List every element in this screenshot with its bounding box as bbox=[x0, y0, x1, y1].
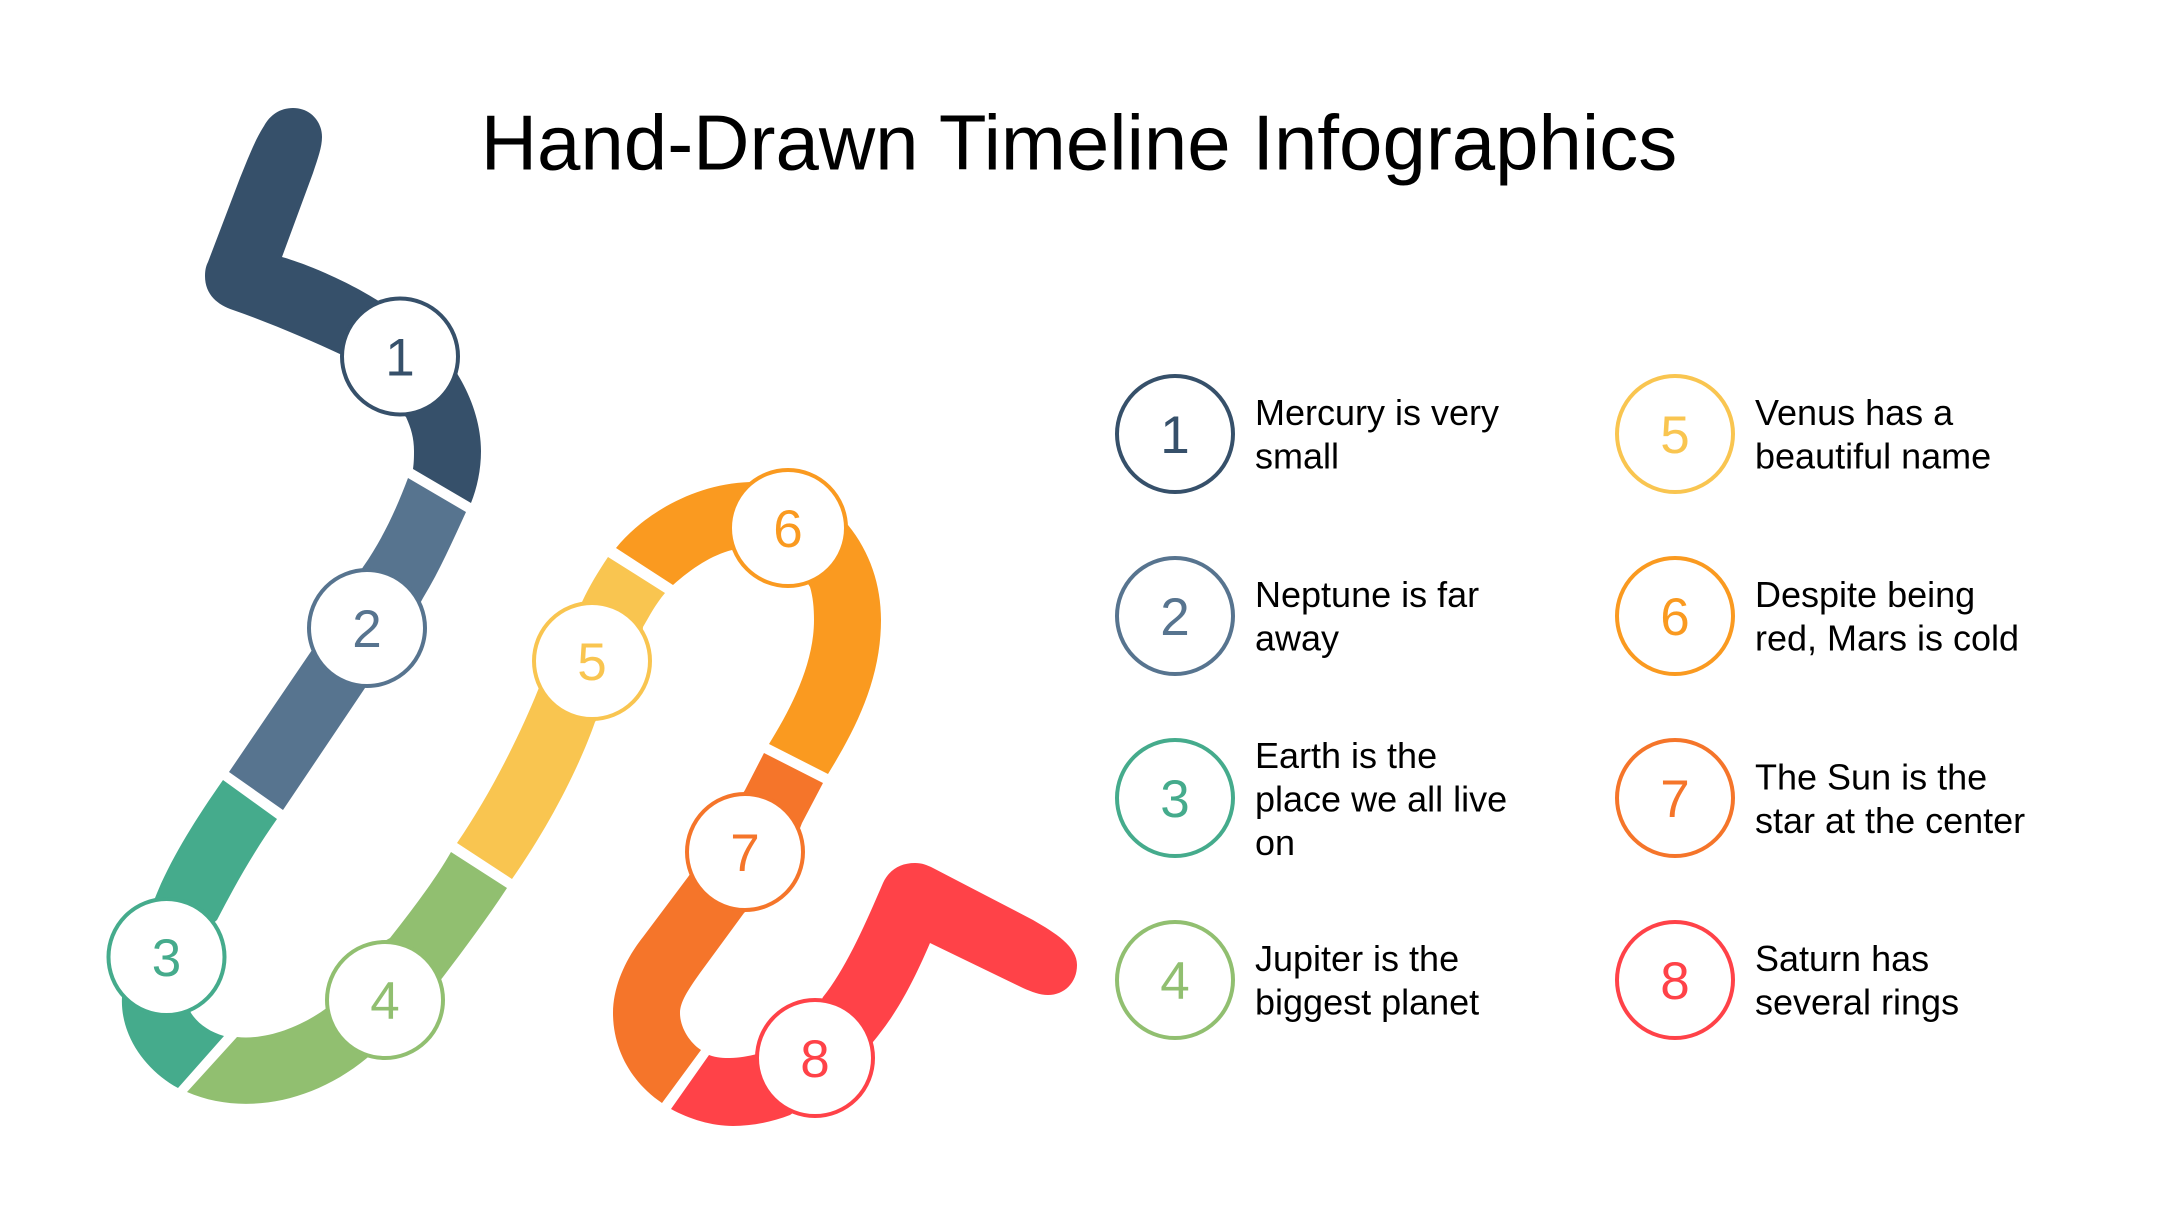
legend item 5: beautiful name bbox=[1755, 436, 1991, 476]
marker 6: 6 bbox=[773, 500, 803, 559]
marker 3: 3 bbox=[152, 929, 181, 988]
marker 4 bbox=[327, 942, 443, 1058]
legend item 1: small bbox=[1255, 436, 1339, 476]
timeline ribbon bbox=[108, 108, 1077, 1126]
legend item 4: Jupiter is the bbox=[1255, 938, 1459, 979]
segment 7 bbox=[613, 753, 823, 1103]
legend item 8: 8 bbox=[1660, 952, 1690, 1011]
legend item 5: Venus has a bbox=[1755, 392, 1954, 433]
legend item 2: away bbox=[1255, 618, 1339, 658]
legend item 3 bbox=[1117, 735, 1507, 863]
marker 5 bbox=[534, 603, 650, 719]
legend item 5: 5 bbox=[1660, 406, 1690, 465]
legend item 7: star at the center bbox=[1755, 800, 2025, 841]
marker 1 bbox=[342, 298, 458, 414]
segment 3 bbox=[122, 780, 277, 1088]
title: Hand-Drawn Timeline Infographics bbox=[481, 98, 1677, 186]
legend item 7: 7 bbox=[1660, 770, 1690, 829]
legend item 2: Neptune is far bbox=[1255, 574, 1479, 615]
marker 6 bbox=[730, 470, 846, 586]
marker 7 bbox=[687, 794, 803, 910]
legend item 1 bbox=[1117, 376, 1499, 492]
segment 8 bbox=[671, 863, 1077, 1126]
legend item 4 bbox=[1117, 922, 1479, 1038]
legend item 2: 2 bbox=[1160, 588, 1190, 647]
legend item 8 bbox=[1617, 922, 1959, 1038]
legend item 6: red, Mars is cold bbox=[1755, 618, 2019, 658]
legend item 7: The Sun is the bbox=[1755, 756, 1987, 798]
legend item 7 bbox=[1617, 740, 2025, 856]
legend item 6: 6 bbox=[1660, 588, 1690, 647]
segment 1 bbox=[205, 108, 481, 503]
legend item 3: Earth is the bbox=[1255, 735, 1437, 776]
legend item 6: Despite being bbox=[1755, 574, 1975, 615]
marker 2: 2 bbox=[352, 600, 382, 659]
marker 8 bbox=[757, 1000, 873, 1116]
marker 3 bbox=[108, 899, 224, 1015]
legend item 3: 3 bbox=[1160, 770, 1190, 829]
legend item 4: 4 bbox=[1160, 952, 1190, 1011]
legend item 6 bbox=[1617, 558, 2019, 674]
marker 1: 1 bbox=[385, 328, 415, 388]
legend item 5 bbox=[1617, 376, 1991, 492]
legend item 4: biggest planet bbox=[1255, 982, 1479, 1022]
legend item 2 bbox=[1117, 558, 1479, 674]
legend item 1: Mercury is very bbox=[1255, 392, 1499, 433]
marker 4: 4 bbox=[370, 972, 400, 1031]
marker 2 bbox=[309, 570, 425, 686]
segment 5 bbox=[457, 557, 665, 879]
marker 7: 7 bbox=[730, 824, 760, 883]
legend item 3: place we all live bbox=[1255, 778, 1507, 820]
marker 8: 8 bbox=[800, 1030, 830, 1089]
marker 5: 5 bbox=[577, 633, 607, 692]
legend item 3: on bbox=[1255, 822, 1295, 863]
legend item 8: several rings bbox=[1755, 982, 1959, 1022]
segment 6 bbox=[616, 482, 881, 774]
segment 4 bbox=[187, 852, 507, 1104]
segment 2 bbox=[229, 478, 466, 810]
legend item 1: 1 bbox=[1160, 406, 1190, 465]
legend item 8: Saturn has bbox=[1755, 938, 1929, 979]
